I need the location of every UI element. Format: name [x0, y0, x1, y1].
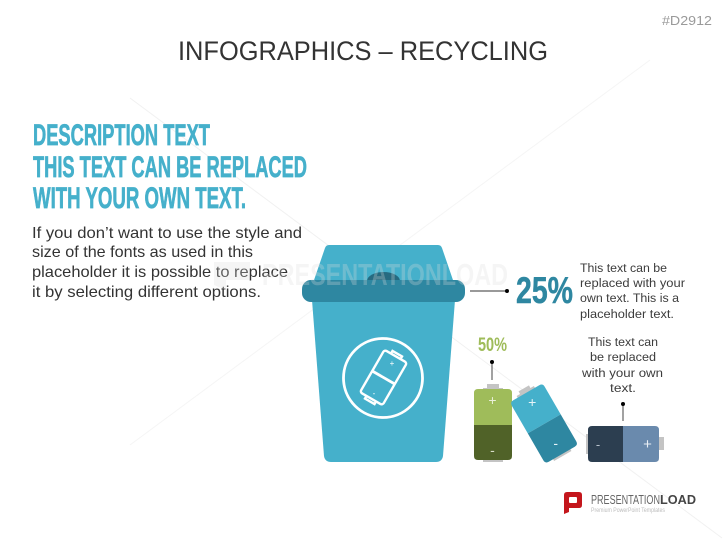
title: INFOGRAPHICS – RECYCLING: [178, 36, 548, 66]
navy battery: +: [643, 436, 652, 453]
text block: battery description: with your own: [581, 366, 663, 380]
green battery: +: [488, 392, 497, 408]
body text block: size of the fonts as used in this: [32, 244, 253, 261]
heading: description text: THIS TEXT CAN BE REPLACED: [33, 151, 307, 184]
connector: 50%: [490, 360, 494, 380]
body text block: If you don’t want to use the style and: [32, 225, 302, 242]
text block: 25% description: placeholder text.: [580, 307, 674, 321]
text block: battery description: [581, 335, 663, 395]
navy battery: [586, 426, 664, 462]
green battery: [474, 384, 512, 462]
recycling bin: +: [390, 359, 395, 368]
connector: 25%: [470, 289, 509, 293]
product code: #D2912: [662, 13, 712, 28]
teal battery: -: [553, 435, 558, 451]
body text block: placeholder it is possible to replace: [32, 264, 288, 281]
logo: PresentationLoad: Premium PowerPoint Templates: [591, 507, 666, 514]
stat: 25%: 25%: [516, 270, 573, 311]
body text block: [32, 225, 302, 301]
logo: PresentationLoad: LOAD: [660, 492, 696, 507]
watermark: [214, 257, 508, 292]
heading: description text: WITH YOUR OWN TEXT.: [33, 182, 246, 215]
teal battery: +: [528, 394, 536, 410]
navy battery: -: [596, 437, 600, 452]
connector: navy battery: [621, 402, 625, 421]
text block: 25% description: replaced with your: [580, 276, 685, 290]
text block: 25% description: own text. This is a: [580, 291, 679, 305]
text block: 25% description: [580, 261, 685, 321]
stat: 50%: 50%: [478, 335, 507, 356]
text block: 25% description: This text can be: [580, 261, 667, 275]
logo: PresentationLoad: PRESENTATION: [591, 492, 660, 507]
green battery: -: [490, 442, 495, 458]
text block: battery description: This text can: [588, 335, 658, 349]
text block: battery description: text.: [610, 381, 636, 395]
text block: battery description: be replaced: [590, 350, 656, 364]
logo: PresentationLoad: [564, 492, 696, 514]
heading: description text: DESCRIPTION TEXT: [33, 119, 210, 152]
recycling bin: [302, 245, 465, 462]
recycling bin: -: [373, 389, 376, 398]
teal battery: [507, 379, 579, 465]
watermark: PRESENTATIONLOAD: [262, 257, 508, 292]
body text block: it by selecting different options.: [32, 284, 261, 301]
heading: description text: [33, 119, 307, 215]
